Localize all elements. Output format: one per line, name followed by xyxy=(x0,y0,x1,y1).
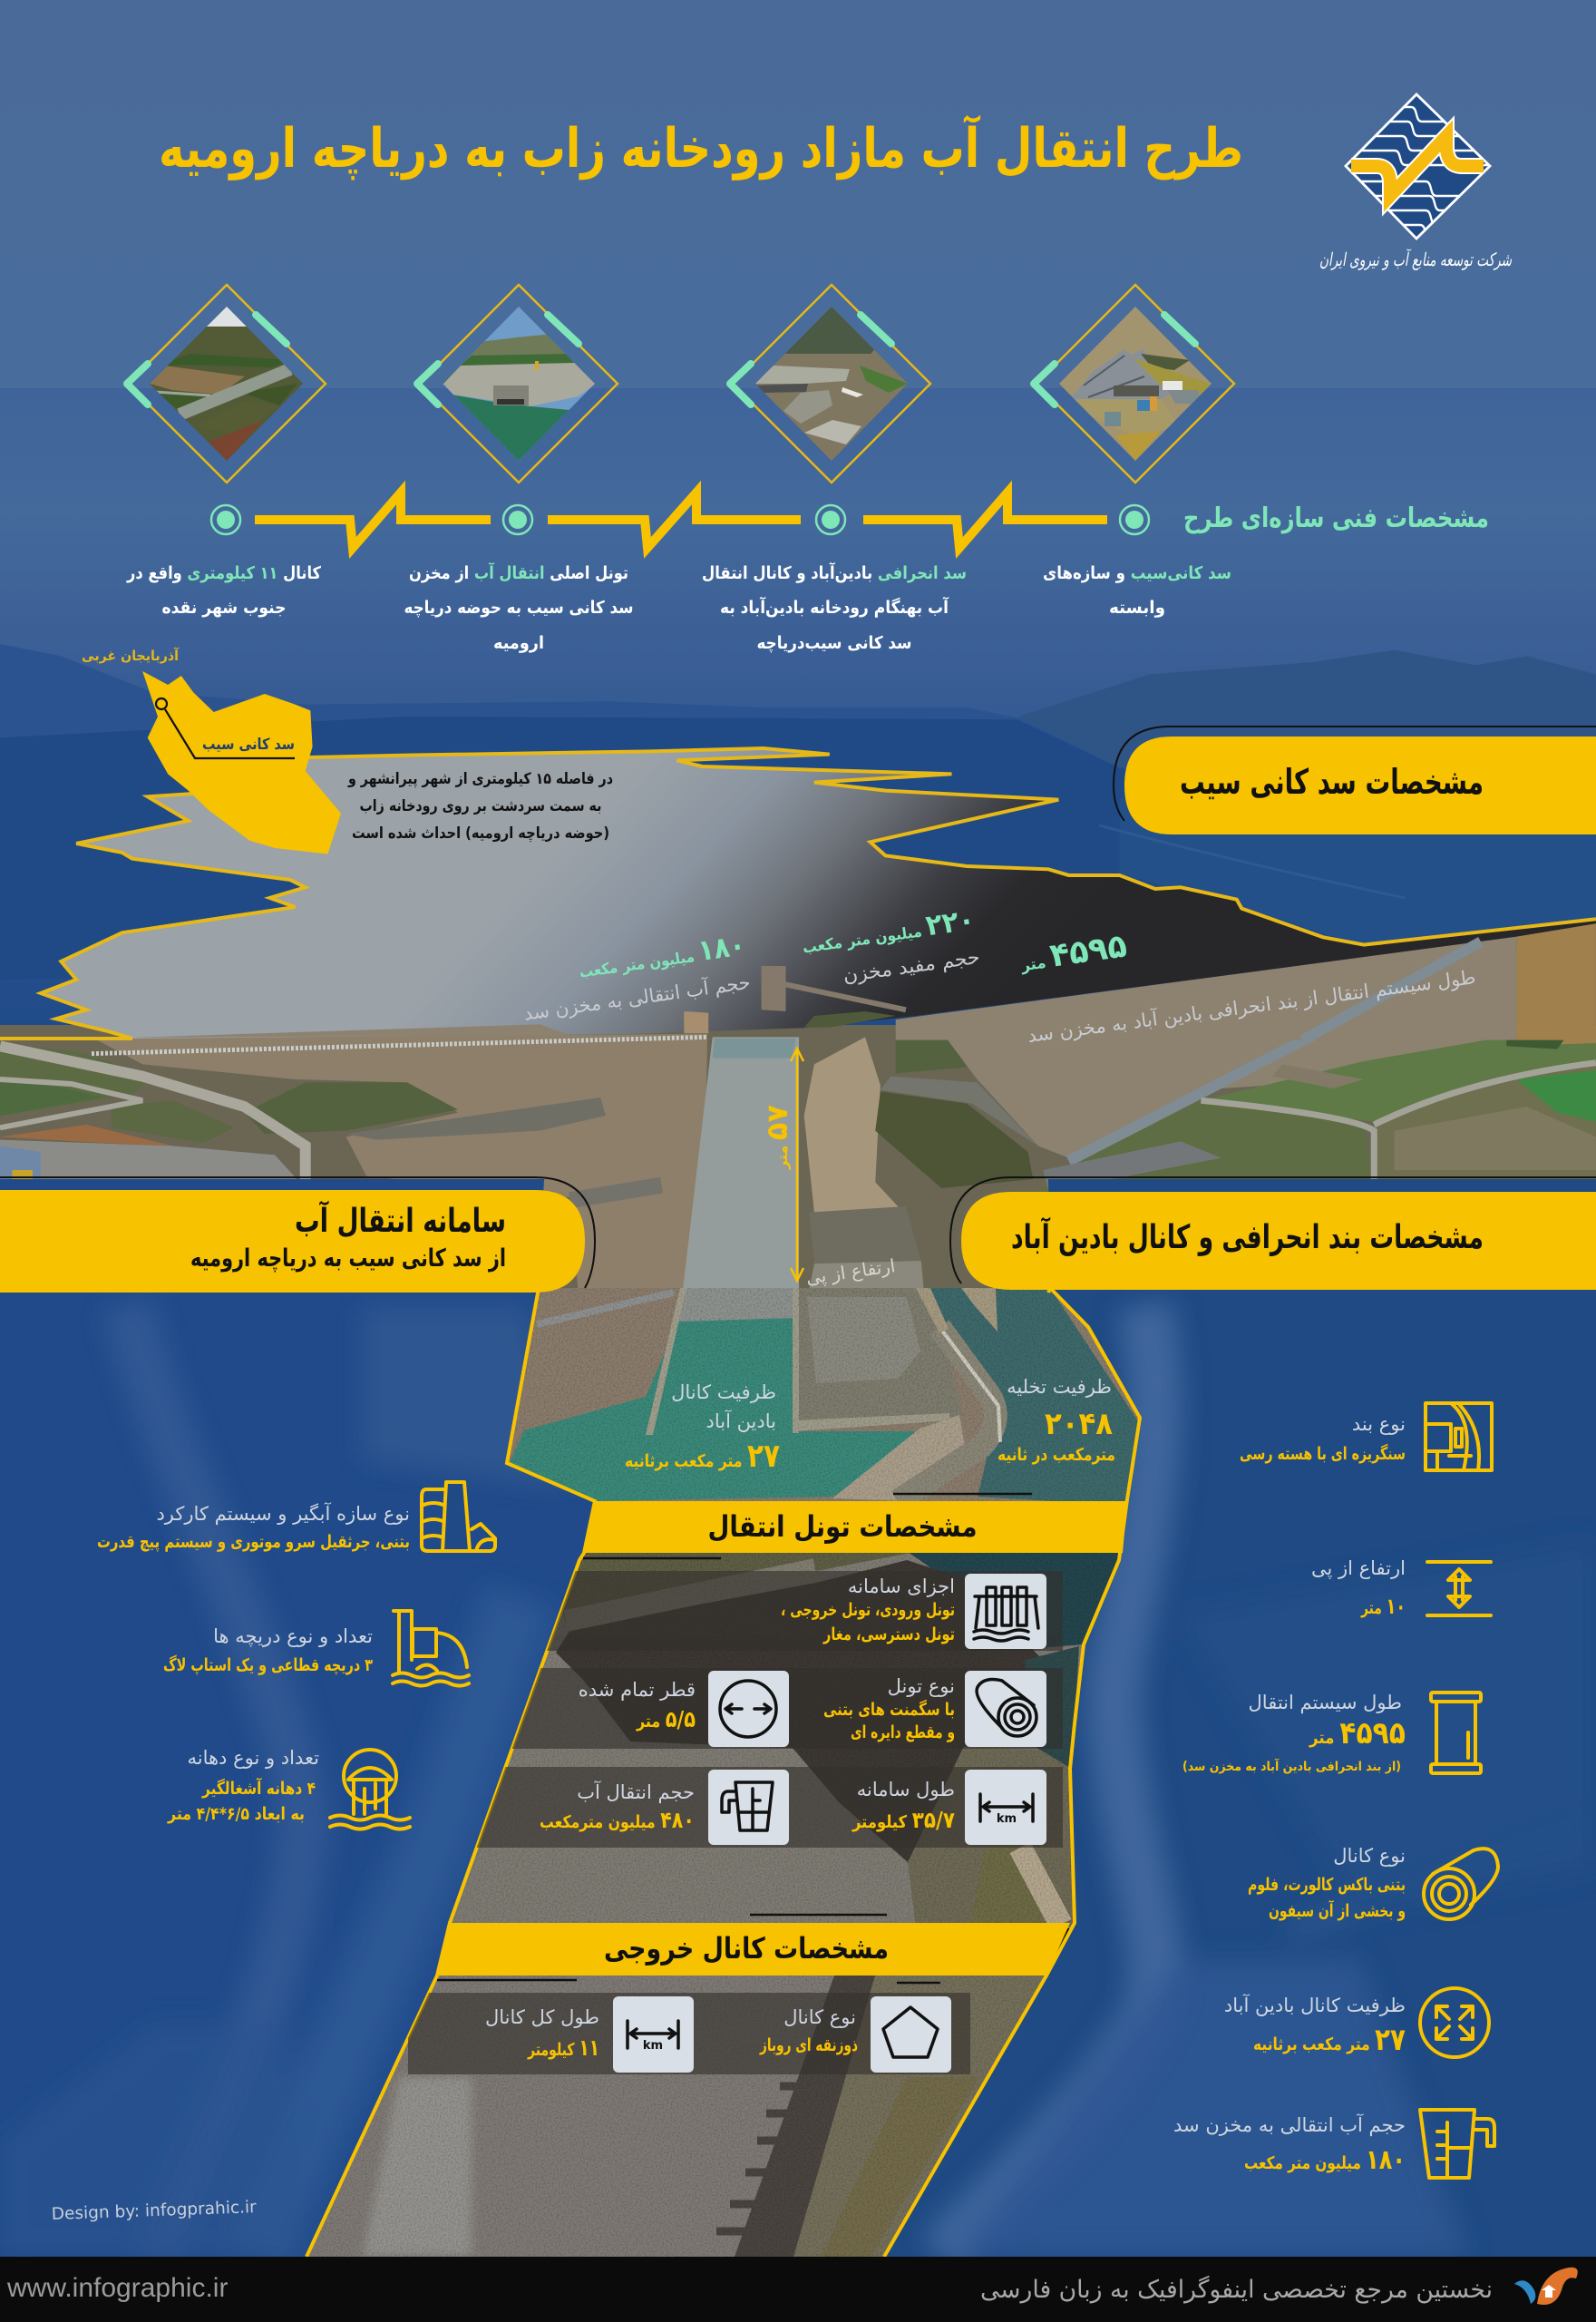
photo diamond 3: transfer tunnel intake xyxy=(417,285,618,483)
tunnel item: system length xyxy=(852,1770,1046,1845)
logo: Iran Water and Power company xyxy=(1319,93,1512,270)
timeline description 4: جنوب شهر نقده xyxy=(161,598,287,618)
left item: trash racks: ۴ دهانه آشغالگیر xyxy=(201,1777,316,1799)
icon: jug xyxy=(722,1782,773,1830)
header divider lines xyxy=(437,1494,1032,1983)
header: transfer tunnel specifications xyxy=(584,1501,1127,1553)
icon: dam section xyxy=(1426,1403,1492,1470)
icon: diameter xyxy=(720,1681,776,1737)
header: outlet canal specifications xyxy=(437,1923,1070,1976)
map of Iran: سد کانی سیب xyxy=(202,736,295,754)
timeline description 1 xyxy=(1043,563,1231,618)
timeline description 1: وابسته xyxy=(1109,598,1165,618)
section heading: technical specifications: مشخصات فنی سازه‌ای طرح xyxy=(1183,502,1489,534)
icon: km length xyxy=(980,1794,1033,1821)
tunnel item: system components: تونل دسترسی، مغار xyxy=(822,1624,955,1644)
photo diamond 2: Badinabad diversion dam xyxy=(730,285,930,483)
right item: transferred volume: ۱۸۰ میلیون متر مکعب xyxy=(1244,2144,1406,2176)
canal item: canal type: ذوزنقه ای روباز xyxy=(759,2035,858,2055)
footer bar: نخستین مرجع تخصصی اینفوگرافیک به زبان فارسی xyxy=(980,2275,1493,2304)
right item: dam type: سنگریزه ای با هسته رسی xyxy=(1240,1443,1406,1464)
timeline description 3: ارومیه xyxy=(493,633,544,653)
tunnel item: system components: تونل ورودی، تونل خروجی ، xyxy=(781,1600,955,1620)
left item: gates: ۳ دریچه قطاعی و یک استاپ لاگ xyxy=(163,1654,373,1675)
stat: discharge capacity xyxy=(998,1376,1115,1465)
tunnel item: finished diameter: ۵/۵ متر xyxy=(636,1706,696,1732)
right item: dam type xyxy=(1240,1403,1492,1470)
tunnel item: water volume xyxy=(540,1770,789,1845)
icon: pipe length xyxy=(1431,1693,1481,1773)
right item: foundation height xyxy=(1311,1557,1491,1619)
stat: Badinabad canal capacity: بادین آباد xyxy=(706,1410,776,1432)
stat: discharge capacity: ۲۰۴۸ xyxy=(1045,1406,1113,1442)
km label: km xyxy=(643,2039,663,2053)
photo diamond 1: Kani Sib dam xyxy=(1034,285,1234,483)
map of Iran xyxy=(142,671,341,854)
stat: transferred volume: ۱۸۰ میلیون متر مکعب xyxy=(577,927,747,985)
stat: Badinabad canal capacity xyxy=(625,1381,780,1475)
stat: transferred volume: حجم آب انتقالی به مخزن سد xyxy=(522,971,752,1026)
timeline description 3 xyxy=(404,561,633,653)
header: transfer tunnel specifications: مشخصات تونل انتقال xyxy=(707,1509,978,1544)
left blue panel xyxy=(0,1179,595,2257)
header: transfer system: از سد کانی سیب به دریاچه ارومیه xyxy=(190,1244,506,1273)
right item: canal capacity: ظرفیت کانال بادین آباد xyxy=(1224,1994,1406,2016)
timeline description 2: سد انحرافی بادین‌آباد و کانال انتقال xyxy=(702,561,967,583)
tunnel item: tunnel type: و مقطع دایره ای xyxy=(851,1722,955,1742)
stat: discharge capacity: ظرفیت تخلیه xyxy=(1007,1376,1112,1398)
right item: system length: ۴۵۹۵ متر xyxy=(1309,1715,1406,1751)
tunnel item: system length: طول سامانه xyxy=(857,1779,955,1800)
header: Kani Sib dam specifications xyxy=(1114,727,1596,834)
icon: tunnel ring xyxy=(977,1680,1036,1736)
right item: canal type: نوع کانال xyxy=(1333,1845,1406,1867)
left item: intake structure xyxy=(97,1482,495,1552)
icon: capacity arrows xyxy=(1420,1988,1489,2057)
canal item: canal type xyxy=(759,1996,951,2073)
icon: gate xyxy=(393,1611,469,1685)
footer bar xyxy=(0,2257,1596,2322)
timeline xyxy=(211,493,1149,548)
background: sky, lake and mountains xyxy=(0,0,1596,1052)
right item: dam type: نوع بند xyxy=(1352,1413,1406,1435)
tunnel item: system components xyxy=(781,1574,1046,1649)
dam landscape photo xyxy=(0,1025,1596,1315)
tunnel zone ground xyxy=(452,1553,1082,1928)
right item: canal type xyxy=(1248,1845,1498,1921)
left item: trash racks: به ابعاد ۶/۵*۴/۴ متر xyxy=(167,1804,305,1824)
outlet zone ground xyxy=(308,1976,834,2257)
left item: gates: تعداد و نوع دریچه ها xyxy=(213,1625,373,1647)
header: transfer system: سامانه انتقال آب xyxy=(295,1200,506,1240)
icon: culvert xyxy=(1424,1849,1498,1919)
stat: useful reservoir volume: ۲۲۰ میلیون متر مکعب xyxy=(800,902,977,961)
right item: canal capacity xyxy=(1224,1988,1489,2058)
reservoir with yellow outline xyxy=(0,744,1596,1043)
timeline description 3: تونل اصلی انتقال آب از مخزن xyxy=(409,561,628,583)
canal item: total length xyxy=(485,1996,694,2073)
right item: canal type: و بخشی از آن سیفون xyxy=(1269,1899,1406,1921)
dam location note: (حوضه دریاچه ارومیه) احداث شده است xyxy=(352,824,609,843)
timeline description 3: سد کانی سیب به حوضه دریاچه xyxy=(404,598,633,618)
tunnel item: tunnel type xyxy=(823,1671,1046,1747)
icon: measuring jug xyxy=(1420,2110,1494,2178)
tunnel info row strips xyxy=(453,1571,1063,1848)
logo: Iran Water and Power company: شرکت توسعه منابع آب و نیروی ایران xyxy=(1319,249,1512,270)
tunnel item: water volume: ۴۸۰ میلیون مترمکعب xyxy=(540,1807,695,1833)
canal item: total length: ۱۱ کیلومتر xyxy=(527,2034,599,2061)
icon: pentagon section xyxy=(883,2007,938,2057)
left item: intake structure: نوع سازه آبگیر و سیستم کارکرد xyxy=(156,1502,410,1526)
stat: useful reservoir volume: حجم مفید مخزن xyxy=(842,946,981,988)
stat: discharge capacity: مترمکعب در ثانیه xyxy=(998,1445,1115,1465)
timeline description 1: سد کانی‌سیب و سازه‌های xyxy=(1043,563,1231,583)
dam location note: در فاصله ۱۵ کیلومتری از شهر پیرانشهر و xyxy=(347,770,613,788)
tunnel item: tunnel type: نوع تونل xyxy=(888,1675,955,1697)
stat: Badinabad canal capacity: ۲۷ متر مکعب برثانیه xyxy=(625,1438,780,1475)
icon: height xyxy=(1427,1562,1491,1615)
province label: آذربایجان غربی xyxy=(82,648,180,664)
header: diversion dam and Badinabad canal xyxy=(950,1177,1596,1290)
icon: km length xyxy=(628,2021,678,2048)
right item: canal capacity: ۲۷ متر مکعب برثانیه xyxy=(1253,2022,1406,2058)
height arrow: ۵۷ متر xyxy=(760,1105,794,1170)
header: Kani Sib dam specifications: مشخصات سد کانی سیب xyxy=(1180,762,1484,802)
timeline description 4 xyxy=(126,563,322,618)
right item: canal type: بتنی باکس کالورت، فلوم xyxy=(1248,1875,1406,1895)
icon: intake tower xyxy=(422,1482,495,1551)
footer logo xyxy=(1514,2268,1578,2305)
tunnel item: finished diameter xyxy=(579,1671,789,1747)
height arrow xyxy=(760,1049,803,1281)
photo diamond 4: outlet canal xyxy=(127,285,326,483)
central photo strip xyxy=(299,1288,1152,2261)
header: transfer system xyxy=(0,1177,595,1293)
dam location note: به سمت سردشت بر روی رودخانه زاب xyxy=(359,797,602,815)
right item: system length: طول سیستم انتقال xyxy=(1249,1692,1402,1714)
stat: system length: ۴۵۹۵ متر xyxy=(1017,927,1129,979)
caption: height from foundation: ارتفاع از پی xyxy=(804,1254,897,1290)
dam location note xyxy=(347,770,613,843)
outlet canal info strip xyxy=(408,1993,970,2074)
stat: useful reservoir volume xyxy=(800,902,981,992)
title: طرح انتقال آب مازاد رودخانه زاب به دریاچه ارومیه xyxy=(159,114,1243,180)
km label: km xyxy=(997,1812,1017,1826)
tunnel item: tunnel type: با سگمنت های بتنی xyxy=(823,1699,955,1720)
left item: gates xyxy=(163,1611,469,1685)
tunnel item: finished diameter: قطر تمام شده xyxy=(579,1679,696,1701)
icon: outlet xyxy=(330,1750,410,1829)
timeline description 4: کانال ۱۱ کیلومتری واقع در xyxy=(126,563,322,583)
stat: Badinabad canal capacity: ظرفیت کانال xyxy=(671,1381,776,1403)
stat: transferred volume xyxy=(516,927,752,1026)
footer bar: www.infographic.ir xyxy=(6,2273,228,2303)
tunnel item: water volume: حجم انتقال آب xyxy=(577,1781,695,1804)
timeline description 2 xyxy=(702,561,967,653)
right blue panel xyxy=(884,1179,1596,2257)
right item: transferred volume: حجم آب انتقالی به مخزن سد xyxy=(1173,2113,1406,2137)
right item: system length: (از بند انحرافی بادین آباد به مخزن سد) xyxy=(1182,1758,1401,1774)
left item: trash racks: تعداد و نوع دهانه xyxy=(187,1747,319,1769)
timeline description 2: سد کانی سیب‌دریاچه xyxy=(756,633,912,653)
canal item: total length: طول کل کانال xyxy=(485,2006,599,2028)
right item: foundation height: ارتفاع از پی xyxy=(1311,1557,1406,1579)
left item: trash racks xyxy=(167,1747,410,1829)
designer credit: Design by: infogprahic.ir xyxy=(51,2198,257,2224)
timeline description 2: آب بهنگام رودخانه بادین‌آباد به xyxy=(720,596,949,618)
caption: system length: طول سیستم انتقال از بند انحرافی بادین آباد به مخزن سد xyxy=(1027,965,1477,1048)
right item: transferred volume xyxy=(1173,2110,1494,2178)
right item: system length xyxy=(1182,1692,1481,1774)
tunnel item: system length: ۳۵/۷ کیلومتر xyxy=(852,1807,955,1833)
right item: foundation height: ۱۰ متر xyxy=(1360,1594,1406,1619)
tunnel item: system components: اجزای سامانه xyxy=(848,1576,955,1597)
canal item: canal type: نوع کانال xyxy=(783,2006,856,2028)
header: outlet canal specifications: مشخصات کانال خروجی xyxy=(604,1931,889,1966)
left item: intake structure: بتنی، جرثقیل سرو موتوری و سیستم پیچ قدرت xyxy=(97,1532,410,1552)
icon: structure xyxy=(974,1587,1038,1641)
